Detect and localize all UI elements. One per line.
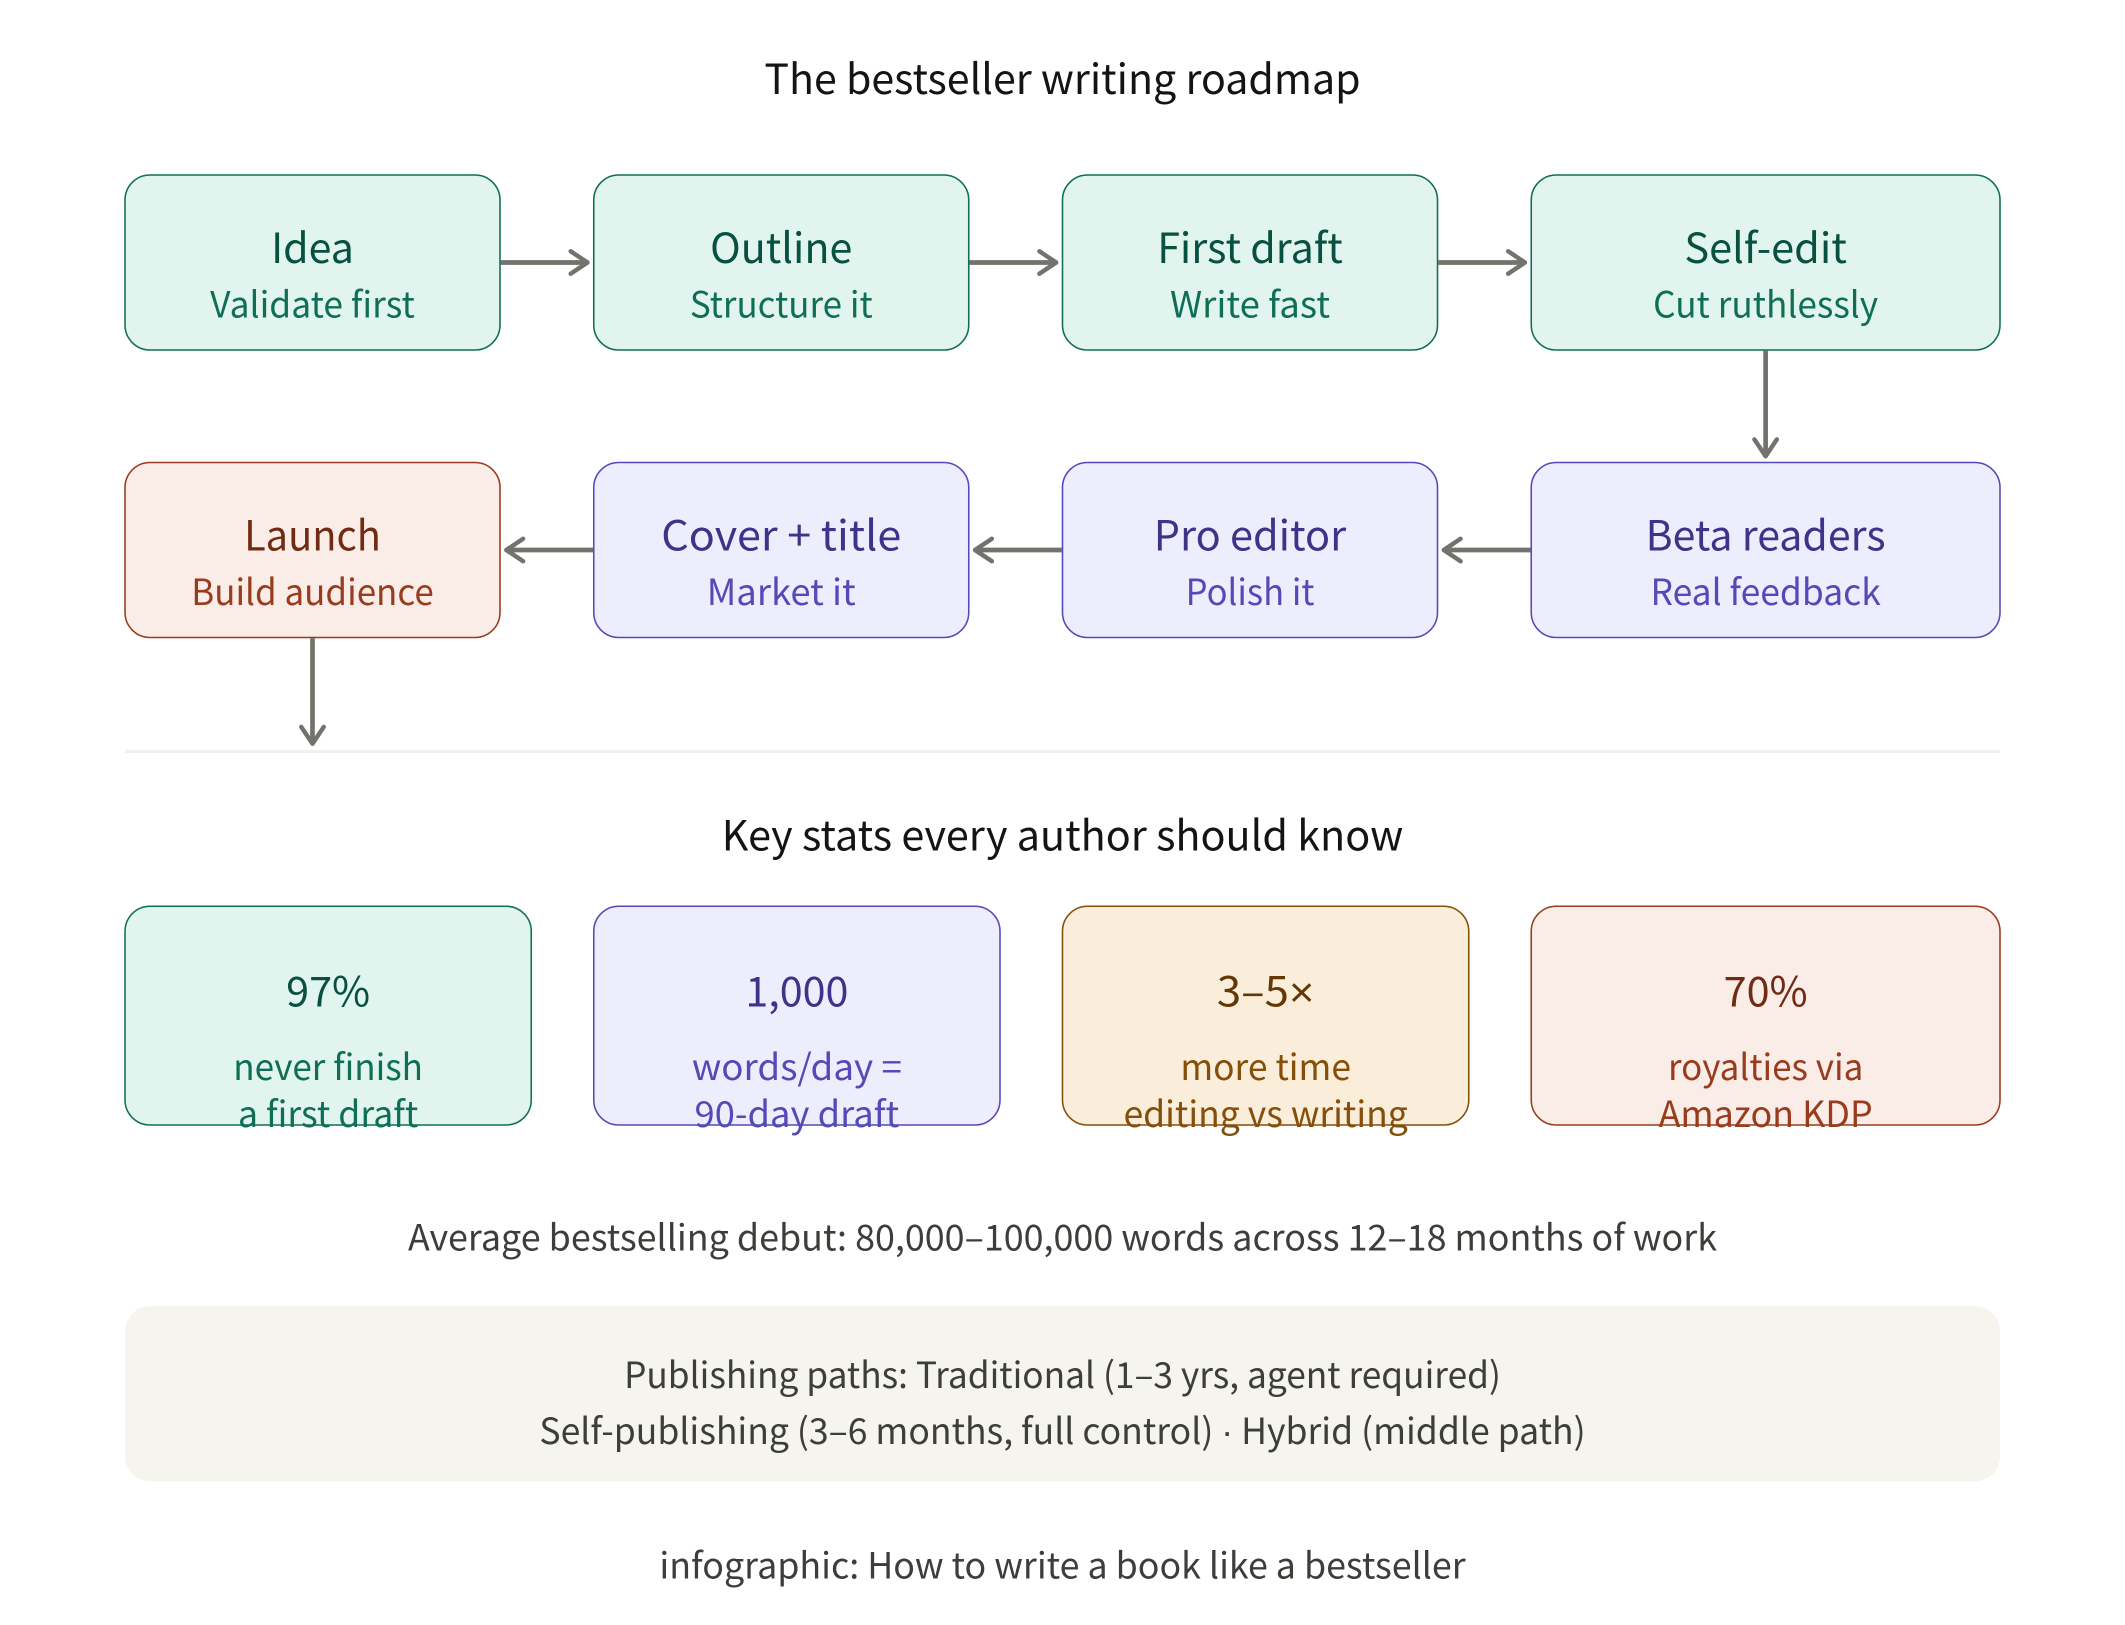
- stat card: 3–5×: [1062, 906, 1469, 1138]
- arrow: Outline to First draft: [969, 251, 1056, 274]
- panel: publishing paths: [125, 1306, 2000, 1481]
- step: Outline: Structure it: [690, 276, 873, 328]
- stat card: 1,000: 90-day draft: [695, 1086, 900, 1138]
- arrow: Pro editor to Cover + title: [975, 539, 1062, 561]
- step: Beta readers: Real feedback: [1650, 564, 1881, 616]
- stat card: 70%: royalties via: [1668, 1039, 1863, 1091]
- title: The bestseller writing roadmap: [764, 46, 1361, 106]
- step: Cover + title: Market it: [707, 564, 856, 616]
- step: Idea: [125, 175, 500, 350]
- step: Launch: [125, 462, 500, 638]
- arrow: Beta readers to Pro editor: [1444, 539, 1531, 561]
- stat card: 97%: [125, 906, 531, 1138]
- stat card: 1,000: 1,000: [745, 958, 848, 1018]
- footer caption: infographic: How to write a book like a bestseller: [659, 1537, 1466, 1589]
- stat card: 1,000: [594, 906, 1000, 1138]
- stat card: 97%: a first draft: [238, 1086, 419, 1138]
- step: Launch: Build audience: [191, 564, 434, 616]
- text: average debut: Average bestselling debut: 80,000–100,000 words across 12–18 months of work: [408, 1209, 1717, 1261]
- stat card: 97%: 97%: [286, 958, 370, 1018]
- step: Beta readers: Beta readers: [1646, 502, 1886, 562]
- step: Outline: [594, 175, 969, 350]
- step: Pro editor: [1062, 462, 1438, 638]
- arrow: First draft to Self-edit: [1438, 251, 1525, 274]
- step: Self-edit: Cut ruthlessly: [1653, 276, 1878, 328]
- step: Pro editor: Pro editor: [1154, 502, 1347, 562]
- stat card: 3–5×: editing vs writing: [1123, 1086, 1408, 1138]
- stat card: 70%: Amazon KDP: [1659, 1086, 1873, 1138]
- step: Beta readers: [1531, 462, 2000, 638]
- arrow: Cover + title to Launch: [506, 539, 593, 561]
- panel: publishing paths: Publishing paths: Traditional (1–3 yrs, agent required): [624, 1347, 1501, 1399]
- step: Self-edit: [1531, 175, 2000, 350]
- step: Idea: Idea: [271, 215, 354, 275]
- step: Cover + title: Cover + title: [661, 502, 901, 562]
- stat card: 97%: never finish: [233, 1039, 423, 1091]
- panel: publishing paths: Self-publishing (3–6 months, full control) · Hybrid (middle path): [539, 1403, 1586, 1455]
- step: Outline: Outline: [710, 215, 852, 275]
- step: First draft: [1062, 175, 1438, 350]
- stat card: 3–5×: more time: [1180, 1039, 1351, 1091]
- step: First draft: First draft: [1157, 215, 1343, 275]
- step: Launch: Launch: [244, 502, 381, 562]
- stat card: 1,000: words/day =: [692, 1039, 902, 1091]
- step: Cover + title: [594, 462, 969, 638]
- step: Idea: Validate first: [210, 276, 415, 328]
- heading: key stats: Key stats every author should know: [722, 802, 1403, 862]
- stat card: 70%: [1531, 906, 2000, 1138]
- step: Self-edit: Self-edit: [1684, 215, 1847, 275]
- step: Pro editor: Polish it: [1186, 564, 1315, 616]
- arrow: Self-edit to Beta readers: [1754, 351, 1777, 456]
- arrow: Launch downward: [301, 638, 324, 744]
- stat card: 3–5×: 3–5 ×: [1217, 958, 1314, 1018]
- stat card: 70%: 70%: [1724, 958, 1808, 1018]
- step: First draft: Write fast: [1170, 276, 1330, 328]
- arrow: Idea to Outline: [501, 251, 588, 274]
